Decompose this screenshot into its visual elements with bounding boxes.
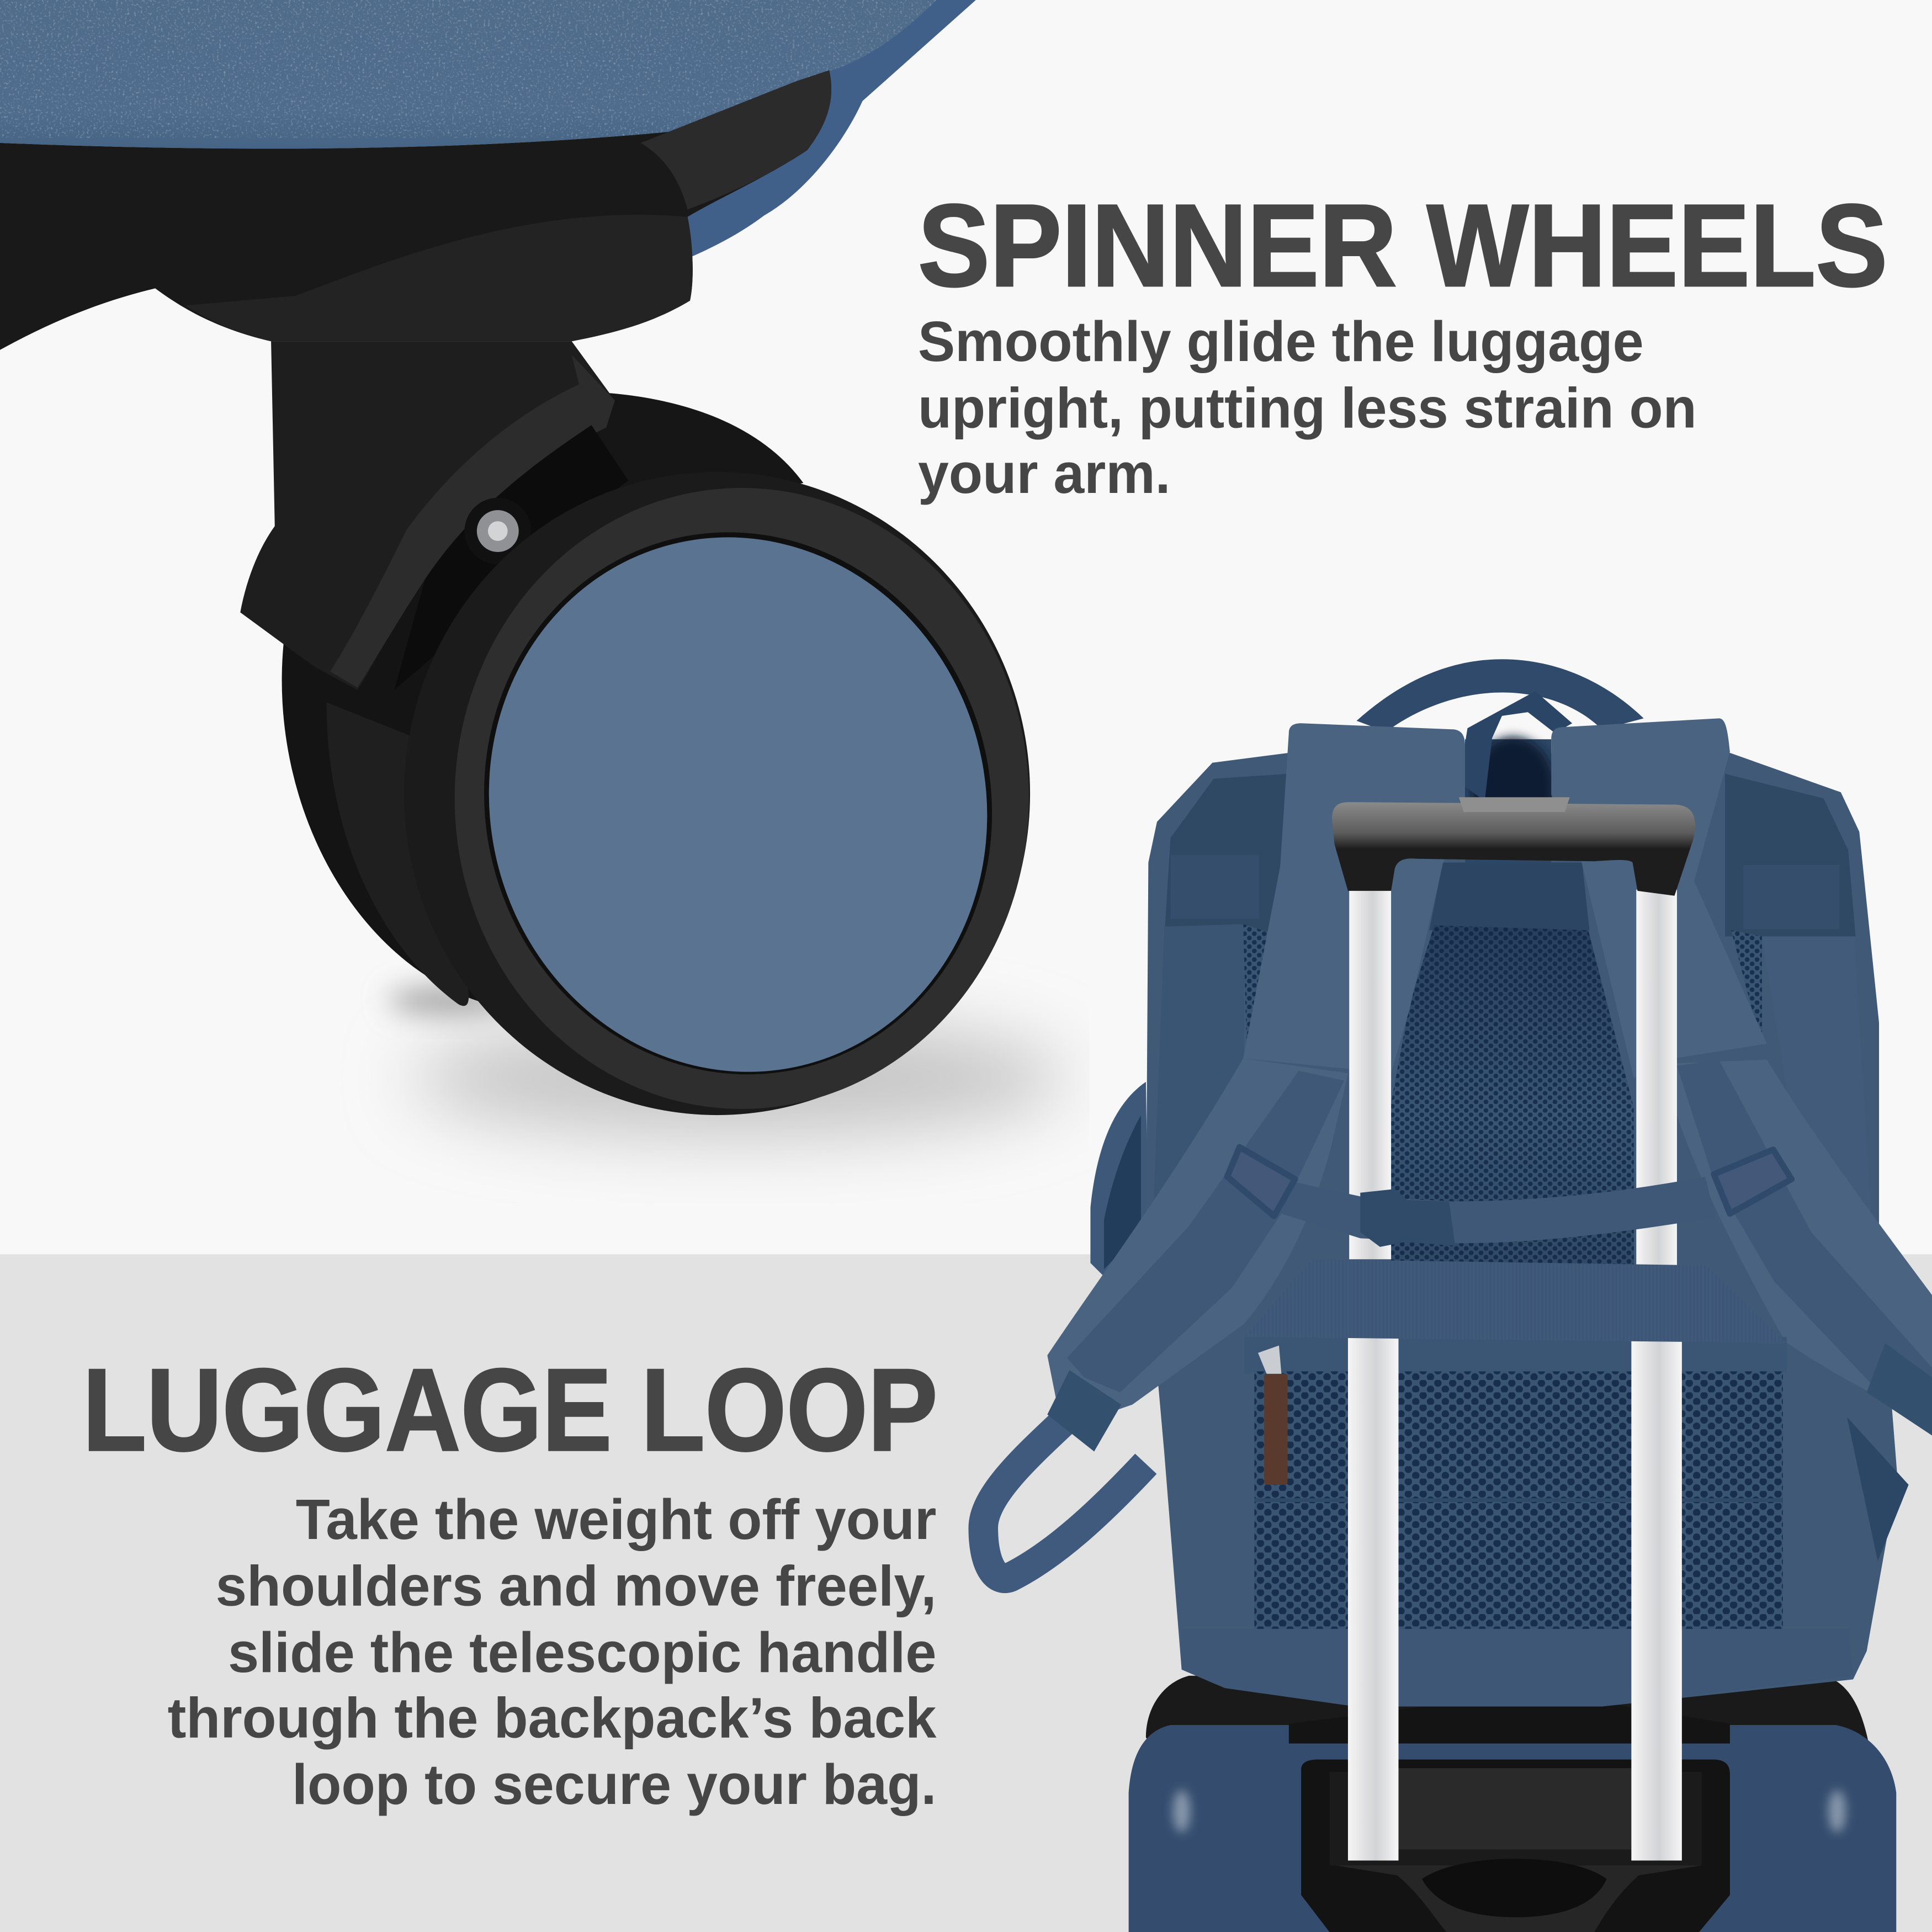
text block: luggage loop description: loop to secure your bag.	[292, 1753, 936, 1816]
suitcase zip band	[1146, 1676, 1868, 1756]
right shoulder pad	[1551, 718, 1767, 1078]
left lower shoulder strap	[1047, 1058, 1348, 1417]
wheel ground shadow	[388, 986, 1066, 1137]
neck gap panel	[1465, 739, 1551, 862]
suitcase body	[1129, 1725, 1896, 1932]
recess dome	[1422, 1859, 1607, 1917]
chassis swivel housing	[185, 215, 693, 341]
suitcase left highlight	[1173, 1790, 1190, 1832]
left shoulder pad	[1243, 723, 1465, 1073]
text block: luggage loop description: shoulders and move freely,	[216, 1554, 936, 1617]
text block: spinner wheels description	[918, 310, 1697, 505]
upper centre webbing	[1429, 862, 1589, 930]
background: grey lower band	[0, 1254, 1932, 1932]
text block: spinner wheels description: Smoothly glide the luggage	[918, 310, 1644, 373]
neck dark shadow	[1471, 737, 1555, 840]
right side triangle	[1847, 1417, 1909, 1561]
backpack main body	[1146, 753, 1898, 1707]
sternum clip	[1360, 1189, 1455, 1247]
left upper dark panel	[1164, 774, 1289, 936]
backpack	[983, 659, 1932, 1707]
recess centre plate	[1394, 1768, 1631, 1849]
right side mesh pocket	[1731, 930, 1762, 1047]
fork stem	[240, 341, 615, 690]
side loop strap	[983, 1423, 1146, 1578]
front wheel inner edge	[423, 475, 1053, 1132]
left adjuster buckle	[1227, 1147, 1295, 1216]
right lower shoulder strap	[1674, 1060, 1932, 1417]
left lower adjuster	[1047, 1370, 1121, 1451]
fork bracket arm	[330, 355, 615, 688]
sternum webbing	[1281, 1177, 1715, 1243]
sternum strap assembly	[1227, 1147, 1792, 1247]
top carry handle arch	[1357, 659, 1644, 732]
handle grip	[1332, 802, 1695, 896]
text block: luggage loop description: slide the telescopic handle	[228, 1621, 936, 1684]
shell speckle	[0, 0, 936, 138]
carry tab strap	[1459, 691, 1572, 801]
left strap webbing	[1067, 1071, 1344, 1392]
left lower pole	[1348, 1337, 1398, 1861]
text block: luggage loop description: Take the weight off your	[296, 1488, 936, 1551]
right side lower panel	[1762, 936, 1873, 1244]
top grab handle	[1289, 1705, 1730, 1743]
front wheel blue disc	[429, 481, 1047, 1128]
back wheel inner panel	[327, 702, 469, 1006]
handle button	[1459, 797, 1570, 812]
right upper pole	[1636, 890, 1677, 1265]
recess inner channel	[1329, 1772, 1702, 1865]
handle recess	[1301, 1760, 1730, 1932]
text block: luggage loop description: through the backpack’s back	[168, 1686, 937, 1749]
lower mesh pocket	[1254, 1371, 1783, 1629]
front wheel face ring	[455, 488, 1029, 1109]
right lower pole	[1631, 1339, 1682, 1861]
suitcase right highlight	[1828, 1790, 1846, 1832]
right upper dark panel	[1725, 774, 1856, 936]
suitcase side shell	[616, 0, 976, 256]
chassis side pad	[641, 70, 831, 209]
wide loop band in front of poles	[1244, 1259, 1787, 1343]
right lower side panel	[1783, 1371, 1854, 1629]
back wheel upper arc	[591, 392, 803, 518]
left lower side panel	[1177, 1371, 1254, 1629]
right adjuster buckle	[1714, 1150, 1792, 1214]
chassis black base	[0, 70, 831, 350]
zipper pocket band	[1244, 1337, 1787, 1374]
left side mesh pocket	[1243, 924, 1281, 1060]
grab strap mesh	[1104, 1115, 1141, 1269]
left side lower panel	[1152, 924, 1244, 1244]
upper back mesh	[1391, 925, 1634, 1269]
mesh fold line	[1254, 1498, 1783, 1502]
text block: luggage loop description	[168, 1488, 937, 1816]
screw	[465, 498, 531, 564]
right strap webbing	[1677, 1060, 1932, 1411]
suitcase textured shell	[0, 0, 936, 148]
telescopic handle	[1332, 797, 1695, 1861]
text block: spinner wheels description: your arm.	[918, 442, 1171, 505]
heading: luggage loop: LUGGAGE LOOP	[83, 1344, 938, 1475]
right webbing band	[1743, 865, 1840, 929]
right lower adjuster	[1867, 1343, 1932, 1435]
bottom hem	[1182, 1629, 1853, 1707]
recess lower plate	[1336, 1865, 1702, 1932]
fork gap dark	[394, 425, 628, 690]
side grab strap	[1090, 1082, 1148, 1281]
suitcase corner with spinner wheel	[0, 0, 1053, 1132]
zipper pull	[1258, 1346, 1288, 1485]
text block: spinner wheels description: upright, putting less strain on	[918, 376, 1697, 440]
left upper pole	[1349, 887, 1391, 1259]
carry-on suitcase under backpack	[1129, 1676, 1896, 1932]
back wheel	[242, 362, 805, 1043]
front wheel tread	[404, 472, 1030, 1115]
left webbing band	[1171, 855, 1259, 919]
